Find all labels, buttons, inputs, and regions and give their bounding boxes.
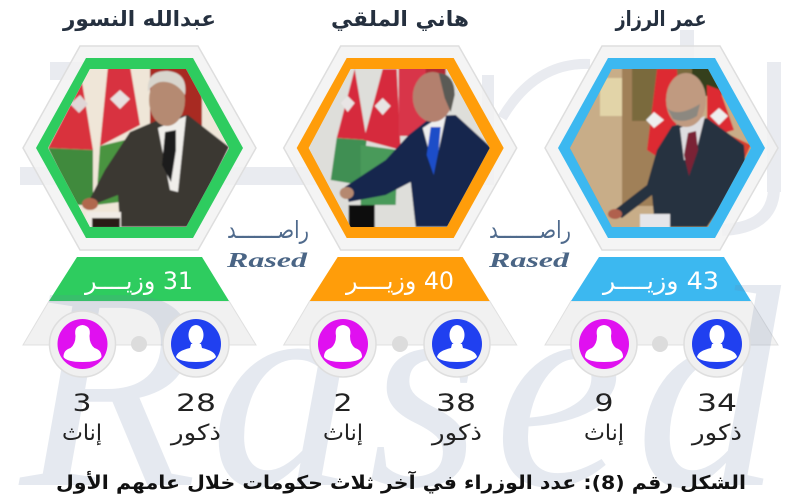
icon: male, Razzaz: [684, 311, 750, 377]
panel: Abdullah Ensour: [23, 7, 256, 250]
small logo: left: [225, 216, 309, 272]
connector dots: [131, 336, 668, 352]
photo: [48, 69, 229, 227]
stats: Mulki: [323, 389, 482, 446]
name: عمر الرزاز: [615, 7, 706, 31]
photo: [570, 69, 751, 227]
panel: Hani Mulki: [284, 7, 517, 250]
icon: male, Ensour: [163, 311, 229, 377]
caption: الشكل رقم (8): عدد الوزراء في آخر ثلاث حكومات خلال عامهم الأول: [56, 470, 746, 494]
stats: Razzaz: 34: [697, 389, 737, 417]
stats: Mulki: إناث: [323, 421, 363, 446]
hexagon frame: [23, 46, 256, 250]
stats: Ensour: [62, 389, 221, 446]
small logo: left: راصـــــــد: [227, 216, 309, 244]
stats: Ensour: ذكور: [170, 421, 221, 446]
stats: Ensour: إناث: [62, 421, 102, 446]
lower grey trapezoids: [23, 301, 778, 345]
count banner: 40 ministers: 40 وزيــــر: [345, 267, 454, 295]
stats: Razzaz: [584, 389, 742, 446]
icon: female, Ensour: [50, 311, 116, 377]
count banner: 31 ministers: 31 وزيــــر: [84, 267, 193, 295]
hexagon frame: [545, 46, 778, 250]
count banner: 43 ministers: 43 وزيــــر: [602, 267, 719, 295]
photo: [308, 69, 490, 227]
stats: Ensour: 3: [72, 389, 92, 417]
panel: Omar Razzaz: [545, 7, 778, 250]
small logo: right: [487, 216, 571, 272]
stats: Razzaz: ذكور: [691, 421, 742, 446]
name: هاني الملقي: [331, 7, 469, 31]
icon: female, Mulki: [310, 311, 376, 377]
hexagon frame: [284, 46, 517, 250]
small logo: right: Rased: [487, 248, 570, 272]
count banner: 40 ministers: [310, 257, 490, 301]
count banner: 43 ministers: [571, 257, 751, 301]
stats: Mulki: ذكور: [431, 421, 482, 446]
stats: Razzaz: إناث: [584, 421, 624, 446]
stats: Mulki: 38: [436, 389, 476, 417]
stats: Ensour: 28: [176, 389, 216, 417]
count banner: 31 ministers: [49, 257, 229, 301]
small logo: right: راصـــــــد: [489, 216, 571, 244]
icon: female, Razzaz: [571, 311, 637, 377]
icon: male, Mulki: [424, 311, 490, 377]
small logo: left: Rased: [225, 248, 308, 272]
stats: Mulki: 2: [334, 389, 352, 417]
stats: Razzaz: 9: [594, 389, 614, 417]
name: عبدالله النسور: [62, 7, 216, 31]
